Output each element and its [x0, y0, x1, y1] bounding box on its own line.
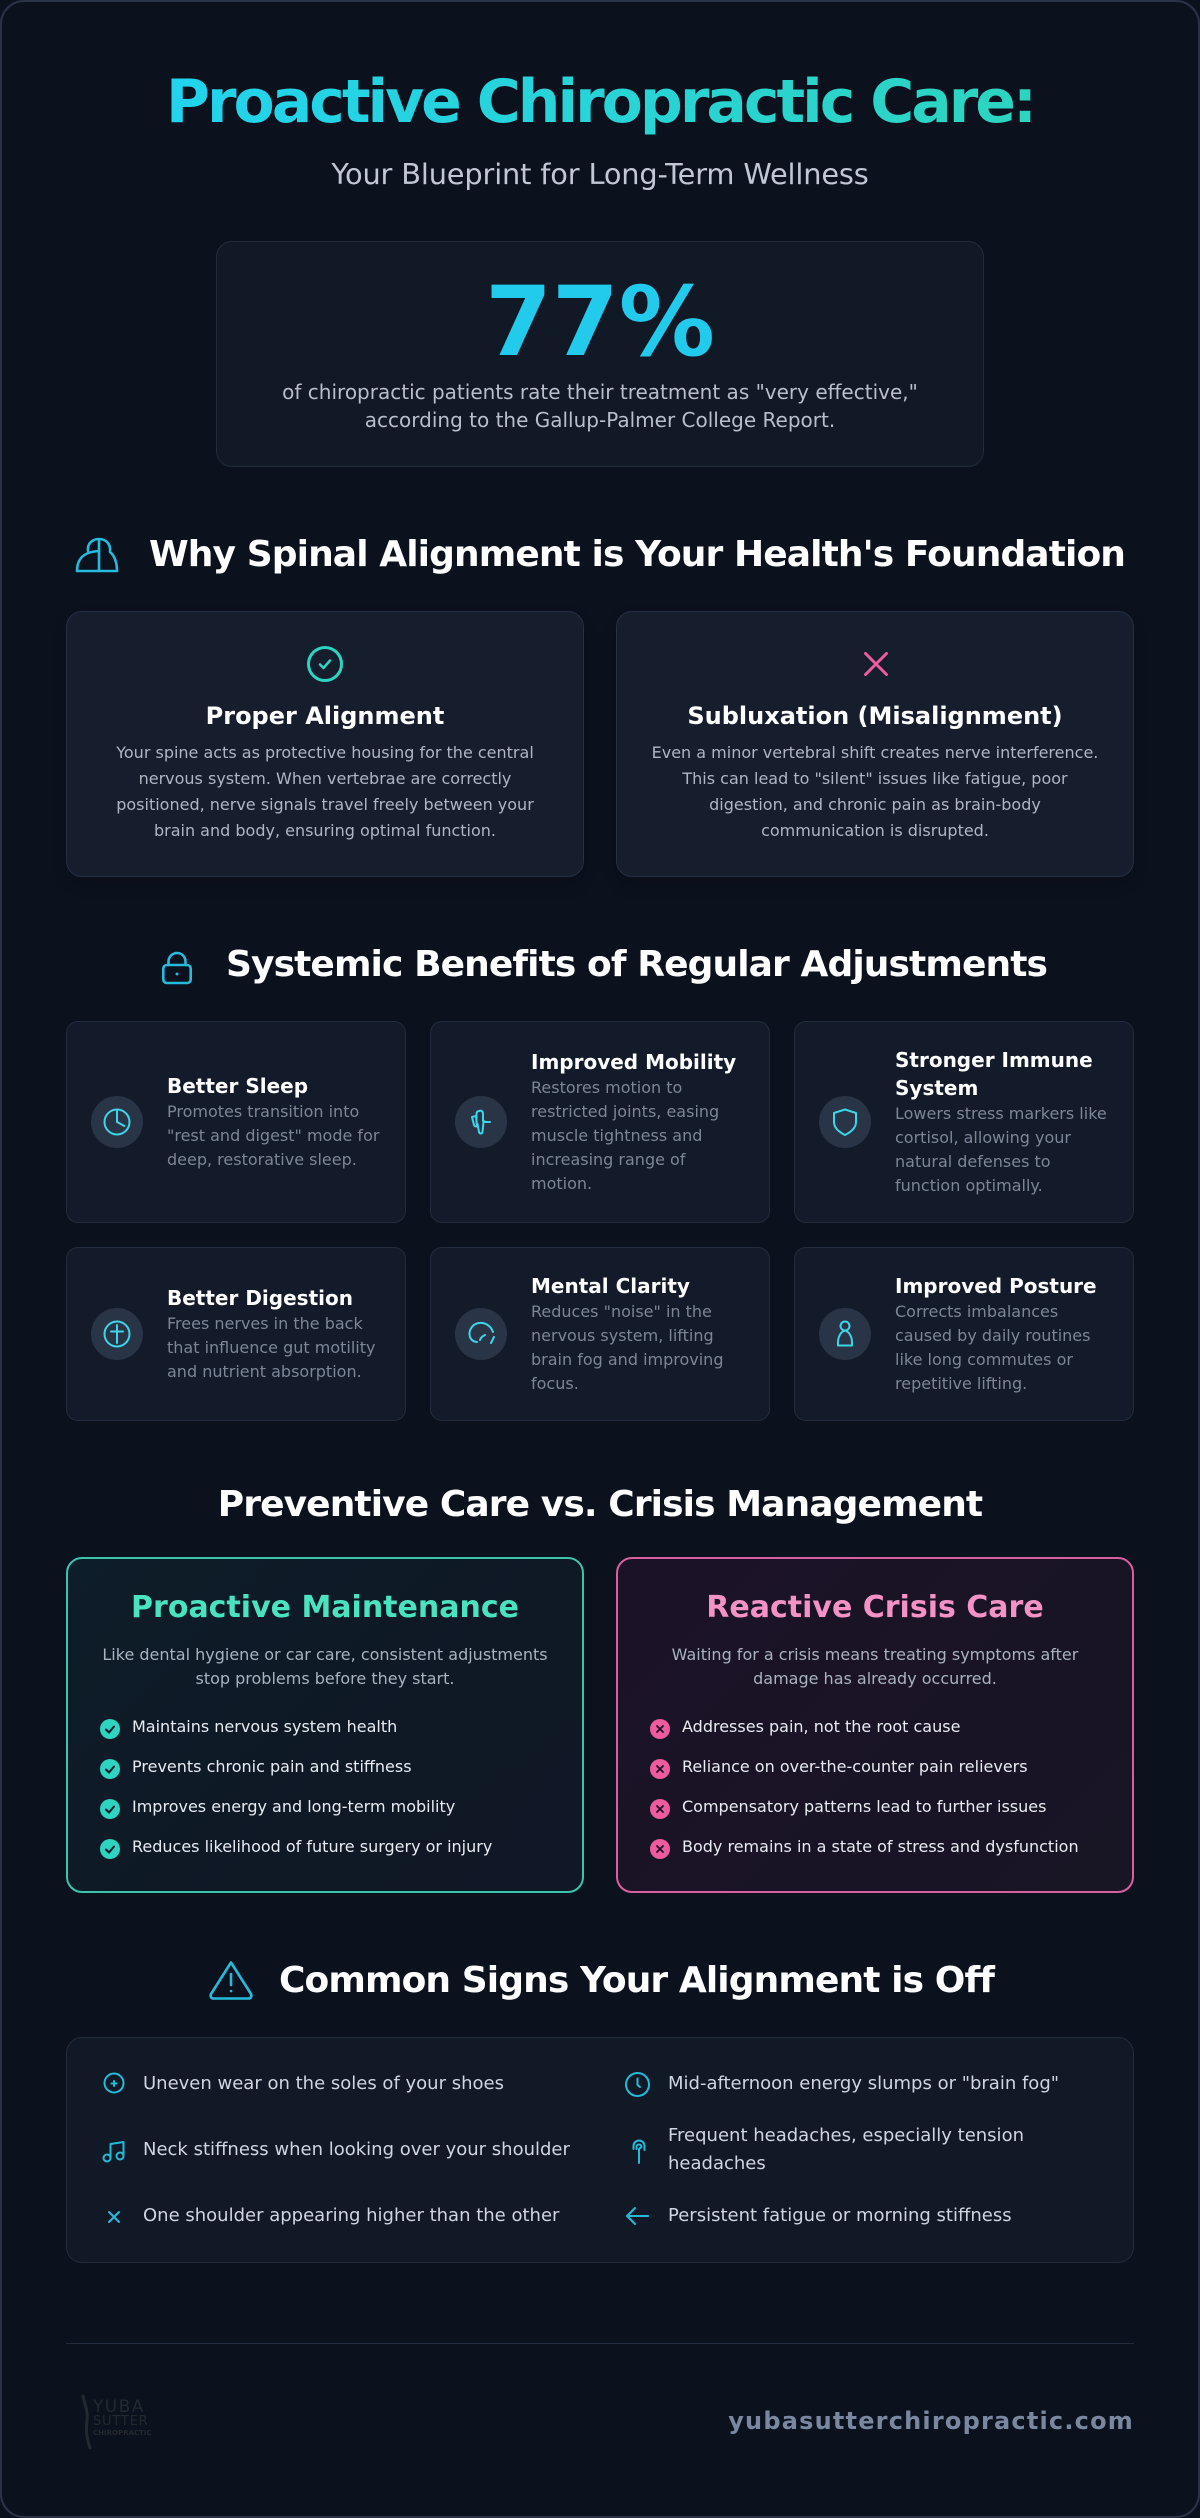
benefit text: "rest and digest" mode for: [167, 1126, 379, 1145]
statistic description: [282, 380, 918, 432]
benefit text: [531, 1050, 736, 1193]
benefit text: restricted joints, easing: [531, 1102, 719, 1121]
icon: cross circle: [91, 1308, 143, 1360]
benefit text: Improved Posture: [895, 1274, 1097, 1298]
sign text: Neck stiffness when looking over your shoulder: [143, 2139, 570, 2160]
benefit text: cortisol, allowing your: [895, 1128, 1071, 1147]
benefit text: System: [895, 1076, 978, 1100]
benefit text: Improved Mobility: [531, 1050, 736, 1074]
panel intro: damage has already occurred.: [753, 1669, 997, 1688]
heading: preventive vs crisis: Preventive Care vs. Crisis Management: [218, 1484, 982, 1525]
sign text: Uneven wear on the soles of your shoes: [143, 2073, 504, 2094]
benefit text: [167, 1074, 380, 1169]
list item: Reliance on over-the-counter pain relievers: [682, 1757, 1028, 1776]
icon: circle plus: [104, 2072, 124, 2094]
logo spine mark: [82, 2394, 92, 2450]
benefit card: better digestion: [66, 1247, 406, 1421]
benefit card: improved mobility: [430, 1021, 770, 1223]
list item: Maintains nervous system health: [132, 1717, 397, 1736]
card text: digestion, and chronic pain as brain-body: [709, 795, 1041, 814]
benefit text: Better Sleep: [167, 1074, 308, 1098]
icon: x mark: [864, 652, 888, 676]
sign text: Frequent headaches, especially tension: [668, 2125, 1024, 2146]
benefit card: immune system: [794, 1021, 1134, 1223]
list item: Compensatory patterns lead to further issues: [682, 1797, 1046, 1816]
panel: common signs list: [66, 2037, 1134, 2263]
list item: Improves energy and long-term mobility: [132, 1797, 455, 1816]
benefit text: [167, 1286, 375, 1381]
card text: brain and body, ensuring optimal function.: [154, 821, 496, 840]
panel title: Reactive Crisis Care: [706, 1590, 1044, 1625]
statistic description: of chiropractic patients rate their treatment as "very effective,": [282, 380, 918, 404]
subtitle: Your Blueprint for Long-Term Wellness: [331, 157, 869, 191]
icon: warning triangle: [209, 1961, 253, 2000]
benefit text: Promotes transition into: [167, 1102, 359, 1121]
statistic description: according to the Gallup-Palmer College Report.: [365, 408, 835, 432]
list item: Body remains in a state of stress and dysfunction: [682, 1837, 1079, 1856]
logo text: SUTTER: [93, 2414, 148, 2429]
footer logo: [82, 2394, 152, 2450]
benefit text: [895, 1274, 1097, 1393]
icon: shield: [819, 1096, 871, 1148]
icon: cross: [108, 2211, 120, 2223]
benefit card: better sleep: [66, 1021, 406, 1223]
heading: systemic benefits: [162, 944, 1047, 985]
benefit text: repetitive lifting.: [895, 1374, 1027, 1393]
heading: spinal alignment: [76, 534, 1125, 575]
panel: proper alignment: [66, 611, 584, 877]
list item: Prevents chronic pain and stiffness: [132, 1757, 412, 1776]
footer website: yubasutterchiropractic.com: [728, 2407, 1134, 2435]
panel intro: Like dental hygiene or car care, consistent adjustments: [102, 1645, 548, 1664]
benefit text: [895, 1048, 1107, 1195]
icon: check circle: [307, 646, 343, 682]
card title: Subluxation (Misalignment): [687, 702, 1063, 730]
benefit text: deep, restorative sleep.: [167, 1150, 357, 1169]
card title: Proper Alignment: [206, 702, 444, 730]
benefit text: Stronger Immune: [895, 1048, 1093, 1072]
panel intro: [672, 1645, 1078, 1688]
card text: [652, 743, 1098, 840]
panel intro: Waiting for a crisis means treating symptoms after: [672, 1645, 1078, 1664]
benefit text: muscle tightness and: [531, 1126, 702, 1145]
benefit text: [531, 1274, 723, 1393]
panel intro: stop problems before they start.: [195, 1669, 454, 1688]
heading text: Systemic Benefits of Regular Adjustments: [226, 944, 1047, 985]
list item: Addresses pain, not the root cause: [682, 1717, 960, 1736]
panel title: Proactive Maintenance: [131, 1590, 519, 1625]
benefit text: motion.: [531, 1174, 592, 1193]
sign text: One shoulder appearing higher than the other: [143, 2205, 559, 2226]
icon: arrow left: [626, 2207, 649, 2225]
icon: music note: [102, 2141, 124, 2162]
benefit text: Lowers stress markers like: [895, 1104, 1107, 1123]
panel: proactive maintenance: [66, 1557, 584, 1893]
benefit card: mental clarity: [430, 1247, 770, 1421]
benefit text: Reduces "noise" in the: [531, 1302, 712, 1321]
heading: common signs: [209, 1960, 996, 2001]
benefit text: Corrects imbalances: [895, 1302, 1058, 1321]
icon: clock: [91, 1096, 143, 1148]
panel intro: [102, 1645, 548, 1688]
card text: Your spine acts as protective housing for the central: [116, 743, 534, 762]
sign text: headaches: [668, 2153, 766, 2174]
logo text: CHIROPRACTIC: [93, 2429, 152, 2437]
card text: This can lead to "silent" issues like fatigue, poor: [682, 769, 1068, 788]
benefit text: Restores motion to: [531, 1078, 682, 1097]
benefit text: nervous system, lifting: [531, 1326, 714, 1345]
panel: key statistic: [216, 241, 984, 467]
card text: [116, 743, 534, 840]
benefit text: natural defenses to: [895, 1152, 1051, 1171]
icon: lock: [162, 952, 192, 984]
card text: communication is disrupted.: [761, 821, 989, 840]
benefit text: function optimally.: [895, 1176, 1043, 1195]
benefit text: focus.: [531, 1374, 579, 1393]
list item: Reduces likelihood of future surgery or injury: [132, 1837, 492, 1856]
icon: gauge: [455, 1308, 507, 1360]
benefit text: and nutrient absorption.: [167, 1362, 362, 1381]
benefit text: Better Digestion: [167, 1286, 353, 1310]
logo text: YUBA: [93, 2397, 145, 2417]
panel: subluxation: [616, 611, 1134, 877]
card text: positioned, nerve signals travel freely between your: [116, 795, 534, 814]
heading text: Common Signs Your Alignment is Off: [279, 1960, 994, 2001]
icon: person: [819, 1308, 871, 1360]
sign text: Mid-afternoon energy slumps or "brain fog": [668, 2073, 1059, 2094]
big number: 77%: 77%: [485, 266, 715, 378]
sign text: Persistent fatigue or morning stiffness: [668, 2205, 1012, 2226]
icon: cloud spine: [76, 538, 118, 572]
benefit text: Frees nerves in the back: [167, 1314, 363, 1333]
benefit text: that influence gut motility: [167, 1338, 375, 1357]
heading text: Why Spinal Alignment is Your Health's Foundation: [149, 534, 1125, 575]
icon: joint: [455, 1096, 507, 1148]
benefit text: caused by daily routines: [895, 1326, 1090, 1345]
sign text: [668, 2125, 1024, 2174]
card text: nervous system. When vertebrae are correctly: [139, 769, 511, 788]
icon: ear: [632, 2140, 646, 2164]
benefit text: like long commutes or: [895, 1350, 1073, 1369]
benefit text: brain fog and improving: [531, 1350, 723, 1369]
benefit card: improved posture: [794, 1247, 1134, 1421]
icon: clock: [625, 2072, 650, 2097]
card text: Even a minor vertebral shift creates nerve interference.: [652, 743, 1098, 762]
title: Proactive Chiropractic Care:: [166, 67, 1034, 137]
benefit text: Mental Clarity: [531, 1274, 690, 1298]
panel: reactive crisis care: [616, 1557, 1134, 1893]
benefit text: increasing range of: [531, 1150, 685, 1169]
